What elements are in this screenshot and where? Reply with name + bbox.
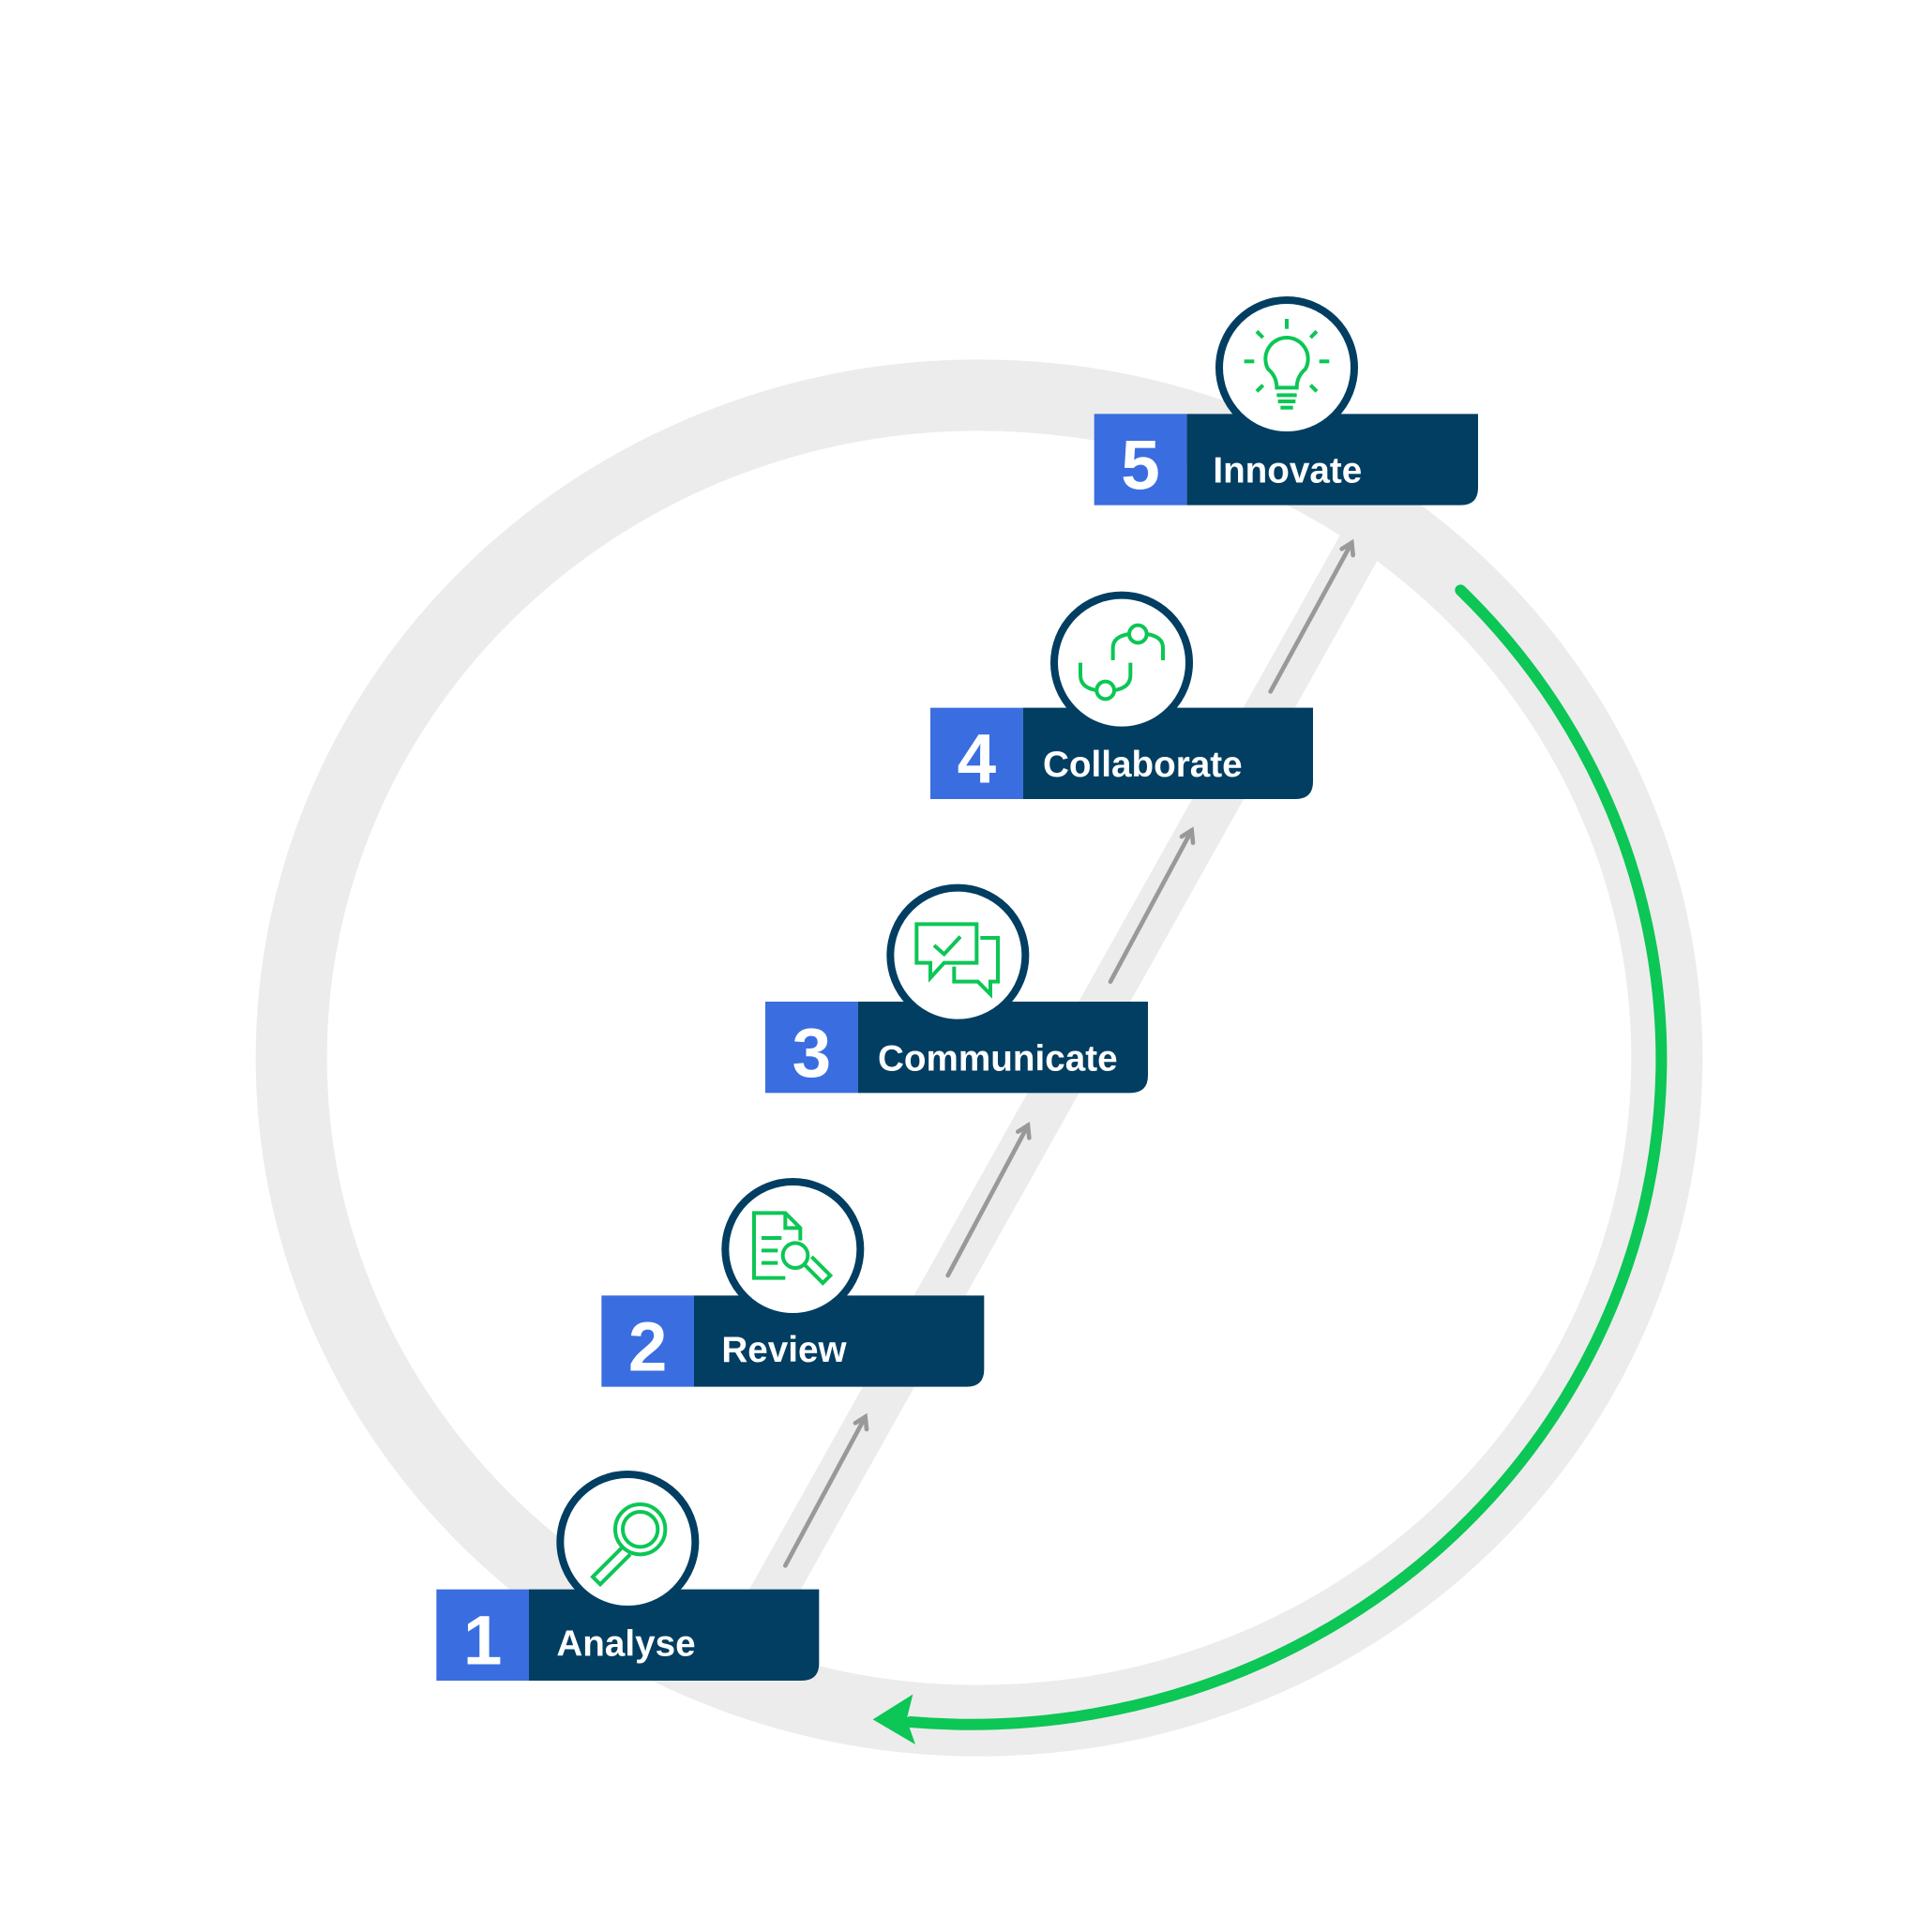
- step 5: Innovate: [1094, 300, 1478, 506]
- step 2: Review: Review: [721, 1330, 847, 1370]
- background ring: [292, 395, 1667, 1721]
- step 1: Analyse: 1: [463, 1601, 502, 1680]
- step 4: Collaborate: Collaborate: [1043, 745, 1243, 785]
- step 1: Analyse: [436, 1474, 819, 1681]
- step 1: Analyse: Analyse: [556, 1623, 696, 1664]
- arrows between steps: [785, 543, 1353, 1565]
- step 3: Communicate: [765, 888, 1148, 1093]
- step 4: Collaborate: 4: [958, 719, 997, 798]
- step 5: Innovate: Innovate: [1213, 451, 1362, 491]
- step 4: Collaborate: [930, 596, 1313, 799]
- diagonal band: [765, 540, 1363, 1607]
- step 5: Innovate: 5: [1121, 425, 1160, 504]
- step 3: Communicate: 3: [792, 1013, 831, 1092]
- step 3: Communicate: Communicate: [878, 1038, 1118, 1079]
- green return arrow: [873, 590, 1661, 1744]
- step 2: Review: 2: [628, 1306, 667, 1385]
- step 2: Review: [601, 1182, 984, 1387]
